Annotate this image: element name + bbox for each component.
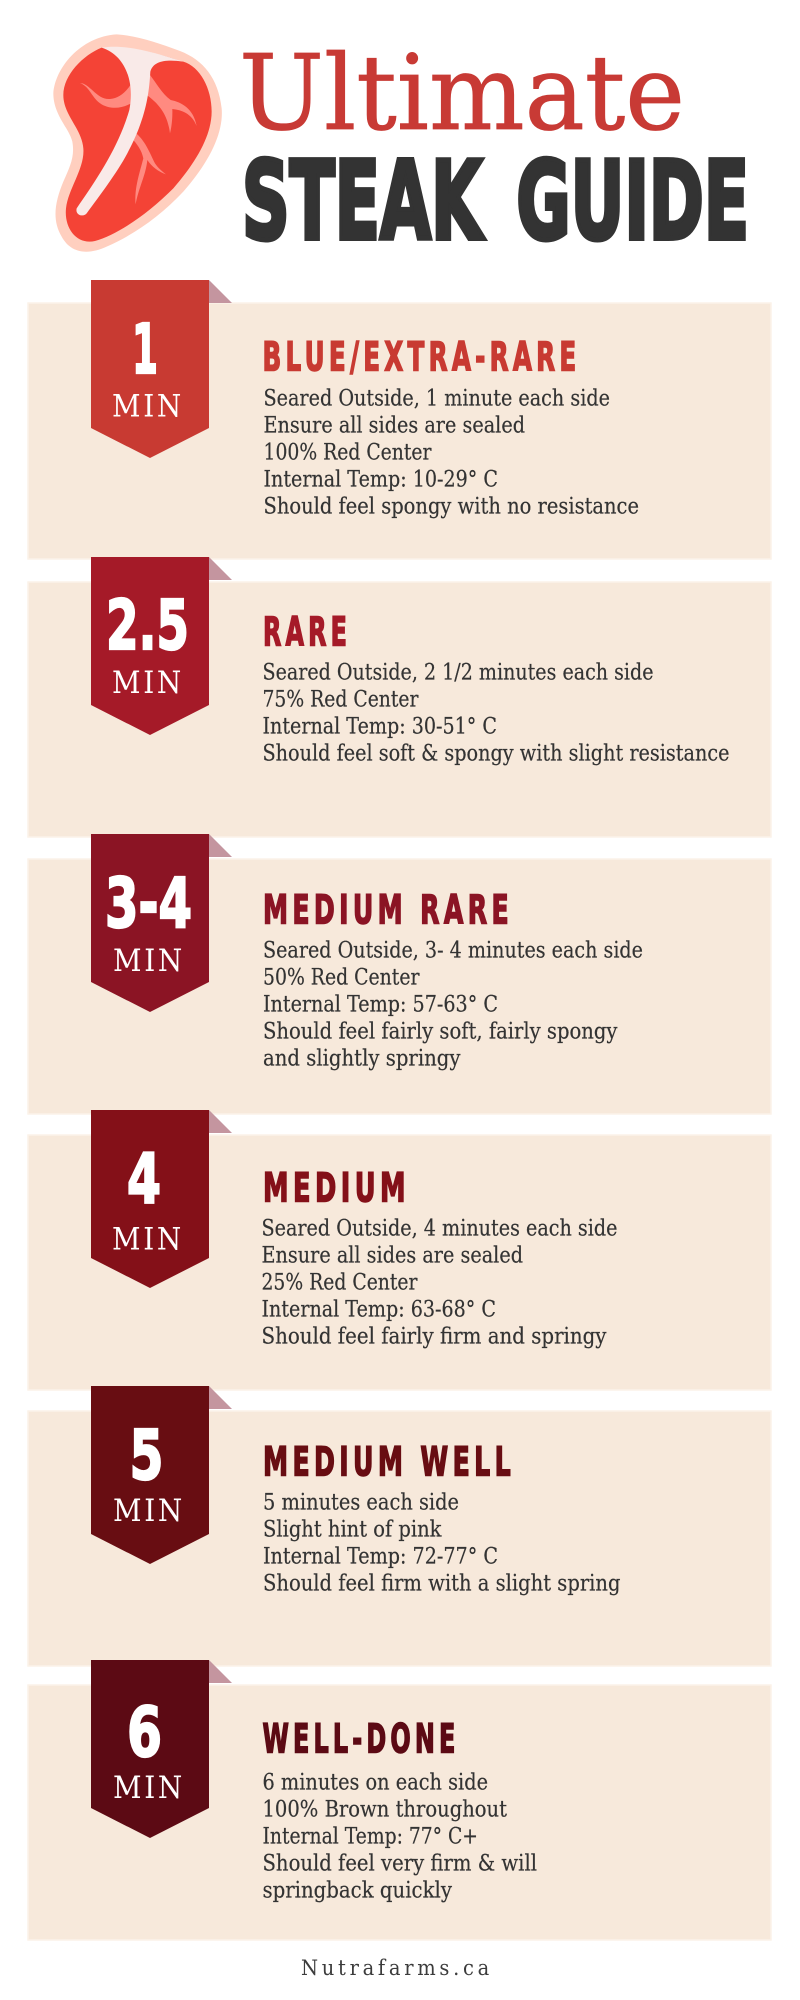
body text: 75% Red Center xyxy=(262,688,419,712)
title: Ultimate: Ultimate xyxy=(239,32,685,154)
icon: steak fat strip xyxy=(76,47,183,215)
panel: medium xyxy=(28,1110,771,1390)
heading: MEDIUM RARE xyxy=(263,886,513,934)
ribbon: 1 min: 1 xyxy=(132,310,158,390)
body text: Ensure all sides are sealed xyxy=(262,1243,523,1268)
body text: Internal Temp: 10-29° C xyxy=(264,468,498,493)
body text xyxy=(262,1216,618,1349)
ribbon: 6 min: 6 xyxy=(127,1693,162,1773)
ribbon: 5 min: 5 xyxy=(130,1416,164,1496)
body text: Seared Outside, 2 1/2 minutes each side xyxy=(262,660,654,686)
body text: Should feel fairly soft, fairly spongy xyxy=(263,1019,618,1044)
heading: WELL-DONE xyxy=(262,1714,460,1762)
body text: Internal Temp: 72-77° C xyxy=(263,1544,498,1569)
body text: 5 minutes each side xyxy=(263,1490,459,1515)
body text: springback quickly xyxy=(262,1878,453,1903)
ribbon: 2.5 min xyxy=(91,557,232,735)
body text xyxy=(263,938,643,1071)
ribbon: 2.5 min: MIN xyxy=(112,665,184,701)
ribbon: 4 min: MIN xyxy=(112,1222,184,1258)
ribbon: 3-4 min xyxy=(91,834,232,1012)
ribbon: 5 min xyxy=(91,1386,232,1564)
heading: BLUE/EXTRA-RARE xyxy=(262,333,580,381)
heading: MEDIUM xyxy=(263,1164,410,1212)
body text: Internal Temp: 57-63° C xyxy=(263,992,498,1017)
body text: 100% Brown throughout xyxy=(262,1798,507,1822)
icon: steak xyxy=(53,34,222,252)
heading: MEDIUM WELL xyxy=(263,1438,515,1486)
body text: Should feel very firm & will xyxy=(262,1851,537,1876)
panel: rare xyxy=(28,557,771,837)
ribbon: 6 min: MIN xyxy=(113,1770,185,1806)
body text: Should feel soft & spongy with slight resistance xyxy=(262,742,730,766)
ribbon: 6 min xyxy=(91,1660,232,1838)
ribbon: 1 min: MIN xyxy=(112,388,184,424)
ribbon: 3-4 min: 3-4 xyxy=(105,864,192,944)
ribbon: 2.5 min: 2.5 xyxy=(106,586,189,666)
body text: Internal Temp: 77° C+ xyxy=(262,1824,478,1849)
heading: RARE xyxy=(263,608,351,656)
body text: 50% Red Center xyxy=(263,965,420,990)
body text: Seared Outside, 1 minute each side xyxy=(264,387,610,412)
footer: Nutrafarms.ca: Nutrafarms.ca xyxy=(301,1956,493,1980)
body text: Slight hint of pink xyxy=(263,1517,442,1542)
panel: well-done xyxy=(28,1660,771,1940)
body text: 6 minutes on each side xyxy=(262,1770,488,1795)
body text: Should feel spongy with no resistance xyxy=(264,495,639,520)
body text: Should feel fairly firm and springy xyxy=(262,1324,607,1349)
panel: medium rare xyxy=(28,834,771,1114)
body text xyxy=(262,660,730,766)
body text: Internal Temp: 30-51° C xyxy=(262,714,497,740)
ribbon: 1 min xyxy=(91,280,232,458)
body text: 100% Red Center xyxy=(264,441,432,466)
body text: Seared Outside, 4 minutes each side xyxy=(262,1216,618,1241)
body text: Should feel firm with a slight spring xyxy=(263,1571,620,1596)
body text: Ensure all sides are sealed xyxy=(264,414,525,439)
body text xyxy=(263,1490,620,1596)
body text: 25% Red Center xyxy=(262,1270,418,1295)
icon: steak veins xyxy=(80,75,197,204)
ribbon: 4 min: 4 xyxy=(127,1140,161,1220)
ribbon: 5 min: MIN xyxy=(113,1493,185,1529)
panel: medium well xyxy=(28,1386,771,1666)
body text xyxy=(262,1770,537,1903)
ribbon: 4 min xyxy=(91,1110,232,1288)
ribbon: 3-4 min: MIN xyxy=(113,943,185,979)
panel: blue / extra-rare xyxy=(28,280,771,559)
body text: Internal Temp: 63-68° C xyxy=(262,1297,496,1322)
body text: Seared Outside, 3- 4 minutes each side xyxy=(263,938,643,963)
body text xyxy=(264,387,639,520)
body text: and slightly springy xyxy=(263,1046,461,1071)
